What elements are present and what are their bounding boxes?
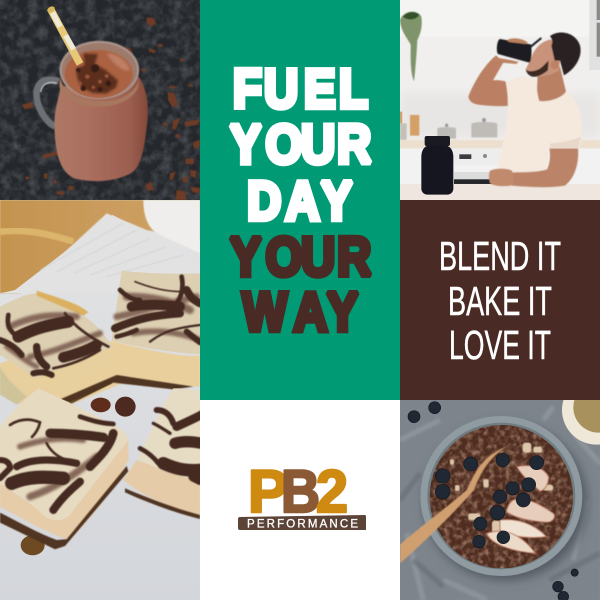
bowl shadow	[423, 422, 587, 581]
tagline text	[439, 233, 561, 368]
front counter	[400, 184, 600, 200]
apple slices	[487, 466, 555, 553]
shaker bottle	[497, 39, 532, 63]
face	[526, 39, 561, 77]
handle	[37, 80, 59, 127]
headline: Fuel your day: FUEL	[233, 58, 368, 119]
photo: chocolate oatmeal bowl with blueberries	[400, 400, 600, 600]
headline: Your way	[230, 226, 371, 342]
panel: logo	[200, 400, 400, 600]
headline: Your way: WAY	[242, 281, 358, 342]
protein tub	[421, 136, 453, 195]
top right bar	[0, 271, 200, 407]
cabinets and oven	[400, 148, 600, 150]
shirt	[497, 76, 582, 173]
left bar	[0, 291, 113, 405]
photo: man drinking from shaker in kitchen	[400, 0, 600, 200]
forearm	[511, 148, 578, 187]
logo: PB2 Performance: 2	[316, 458, 348, 525]
back counter	[400, 140, 600, 149]
logo: PB2 Performance: B	[281, 458, 320, 525]
parchment	[0, 215, 124, 294]
back arm	[468, 55, 510, 106]
logo: PB2 Performance	[238, 458, 366, 530]
logo: PB2 Performance: PERFORMANCE	[247, 518, 358, 530]
drink surface	[65, 50, 133, 98]
jar rim	[61, 42, 138, 98]
blueberries	[408, 402, 578, 600]
hazelnuts	[21, 397, 136, 555]
neck	[537, 67, 566, 102]
headline: Fuel your day: DAY	[247, 170, 352, 231]
right bar	[123, 388, 202, 519]
hanging plant	[400, 12, 422, 81]
headline: Fuel your day: YOUR	[230, 114, 371, 175]
hair	[550, 32, 581, 75]
bowl rim	[420, 416, 582, 576]
window frame	[589, 0, 600, 70]
oatmeal	[427, 423, 577, 570]
front bar	[0, 388, 128, 549]
photo: marbled peanut butter chocolate bars	[0, 200, 202, 600]
panel: brown tagline	[400, 200, 600, 400]
photo: chocolate smoothie in mason jar	[0, 0, 200, 200]
chocolate flakes	[76, 53, 118, 94]
spoon	[400, 447, 507, 563]
nuts	[450, 443, 553, 533]
back items	[400, 112, 497, 140]
wooden table	[0, 200, 200, 293]
scattered chocolate crumbs	[22, 17, 200, 200]
panel: green headline	[200, 0, 400, 400]
man	[468, 32, 582, 187]
jar body	[54, 77, 148, 181]
white dish behind	[143, 200, 200, 253]
headline: Your way: YOUR	[230, 226, 371, 287]
logo: PB2 Performance: P	[248, 458, 288, 525]
straw	[46, 5, 80, 64]
coffee cup	[562, 375, 600, 445]
headline: Fuel your day	[230, 58, 371, 231]
